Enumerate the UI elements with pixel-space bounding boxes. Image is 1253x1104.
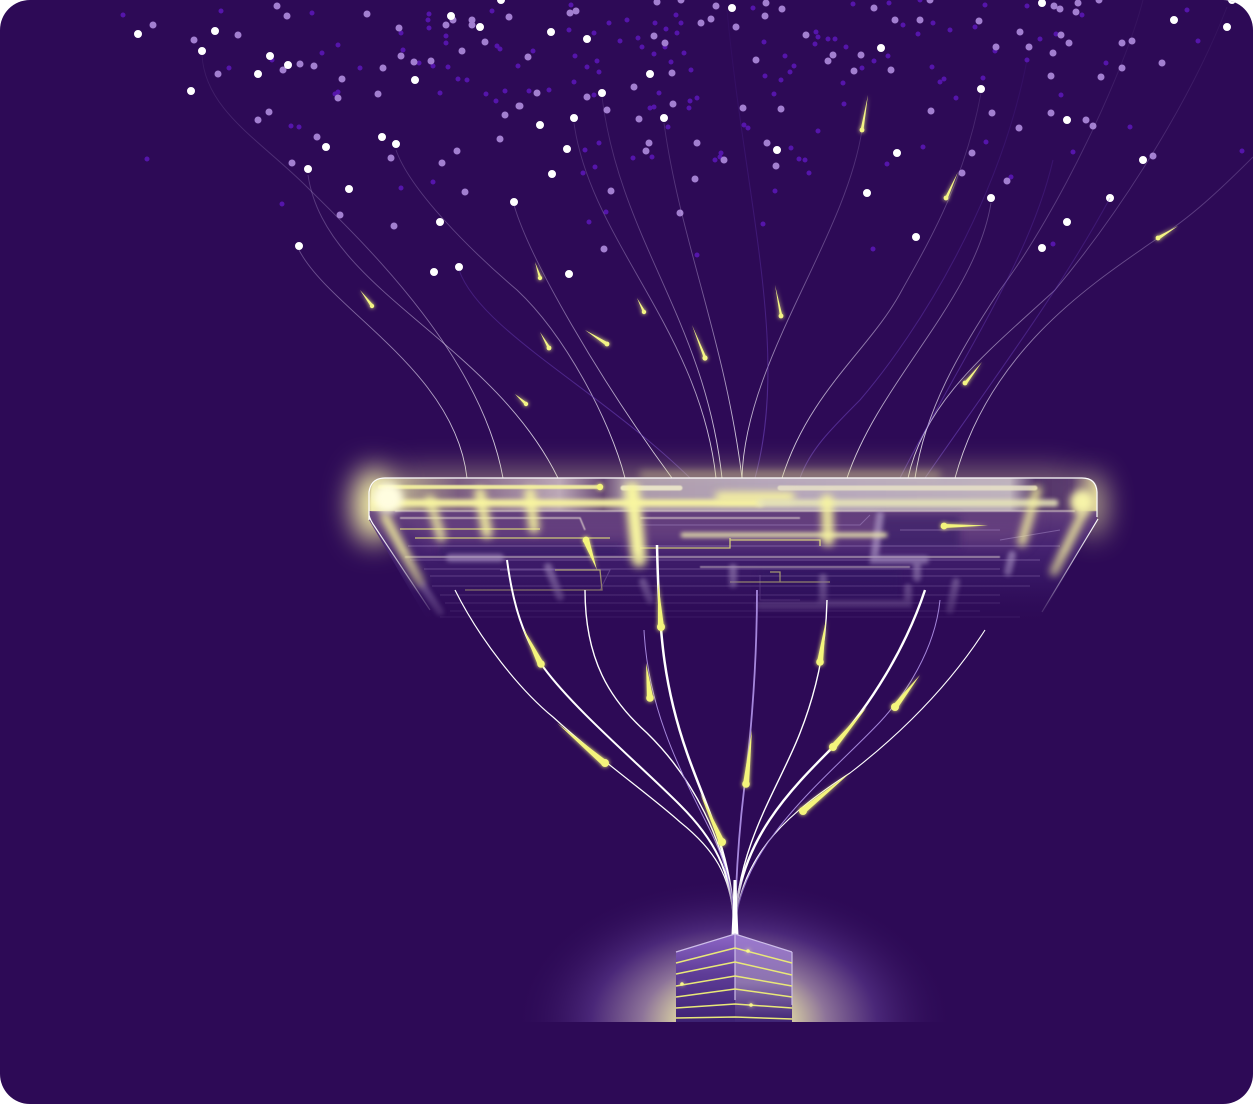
meteors below the plate [523, 484, 988, 846]
lavender stars [153, 0, 1162, 249]
white stars [138, 0, 1232, 274]
plate dark patches [440, 513, 963, 555]
deep purple stars [123, 0, 1242, 255]
plate yellow traces [400, 529, 830, 590]
server left face [676, 934, 735, 1022]
plate rosy haze [400, 516, 1040, 546]
plate: translucent circuit board [369, 478, 1098, 628]
meteors above the plate [360, 95, 1178, 406]
plate corner glows [373, 483, 403, 513]
server right face [735, 934, 792, 1022]
fiber trunk entering server [732, 880, 738, 935]
server signal dots [680, 949, 753, 1007]
plate front face [369, 511, 1097, 590]
upper fibers: stars to plate [202, 0, 1253, 478]
plate top band [371, 478, 1097, 511]
server edges [676, 934, 792, 1005]
violet lower fibers [644, 590, 940, 920]
lower fibers: plate to server [455, 545, 985, 920]
plate thin traces [408, 515, 1060, 617]
plate yellow vertical glows [385, 490, 1083, 582]
server yellow rack lines [676, 948, 792, 1019]
server glow [552, 879, 916, 1022]
plate bright cream traces [395, 511, 1075, 567]
plate outline [369, 478, 1098, 612]
plate glow halo [352, 467, 1106, 543]
plate bright yellow band [375, 487, 1055, 535]
faint violet fibers [459, 10, 1110, 478]
server stack [676, 934, 792, 1022]
plate wide lavender glows [422, 515, 1012, 612]
